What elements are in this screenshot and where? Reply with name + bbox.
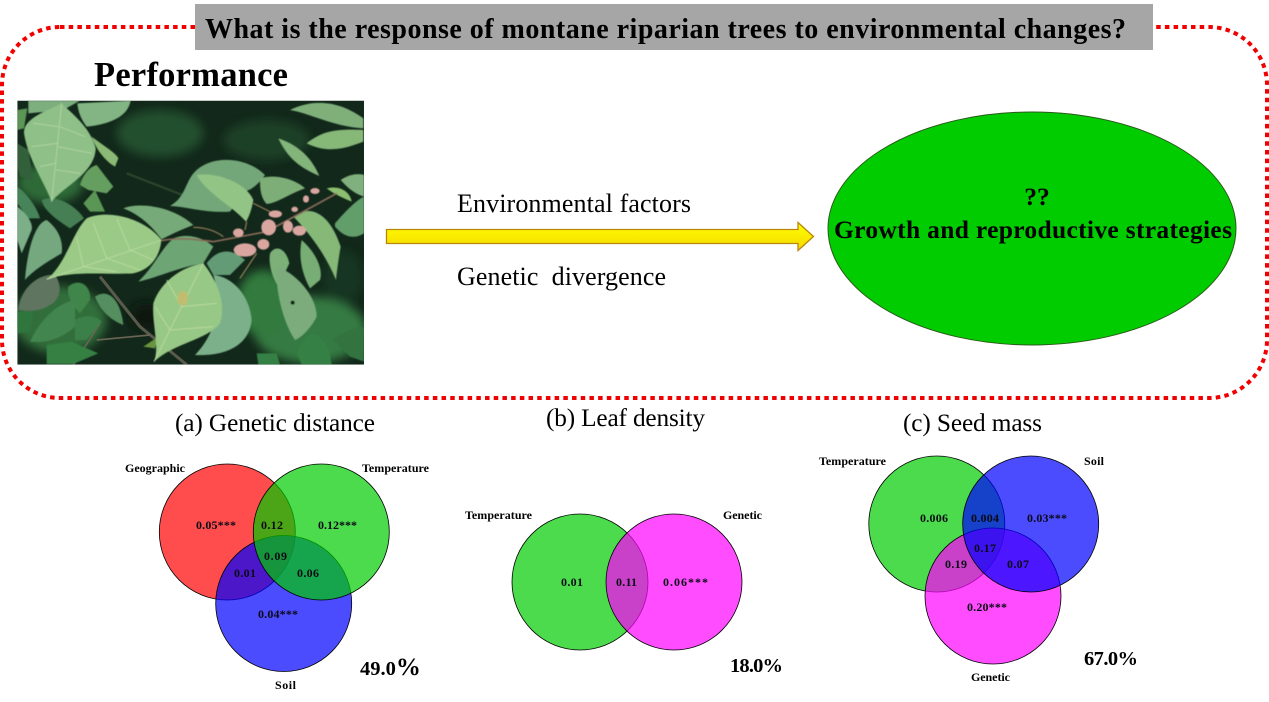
venn labels and values: 0.04*** — [258, 607, 298, 621]
venn labels and values: 0.01 — [561, 575, 583, 589]
ellipse: growth and reproductive strategies: ?? — [1024, 182, 1050, 211]
venn labels and values: 0.05*** — [196, 518, 236, 532]
heading: genetic distance: (a) Genetic distance — [175, 409, 375, 437]
venn labels and values: Genetic — [971, 670, 1011, 684]
heading: performance: Performance — [94, 56, 288, 94]
explained variance 49.0%: 49.0% — [360, 654, 421, 681]
explained variance 67.0%: 67.0% — [1084, 648, 1138, 670]
panel: genetic distance venn — [125, 409, 430, 692]
explained variance 18.0%: 18.0% — [730, 655, 783, 677]
dotted frame: performance panel — [2, 27, 1267, 398]
venn labels and values: 0.06*** — [663, 575, 708, 589]
venn labels and values: 0.07 — [1007, 557, 1029, 571]
venn labels and values: 0.11 — [616, 575, 637, 589]
venn labels and values: Temperature — [819, 454, 887, 468]
venn labels and values: 0.06 — [297, 566, 319, 580]
venn labels and values: 0.09 — [264, 549, 287, 563]
venn labels and values — [125, 461, 430, 692]
venn labels and values: Temperature — [465, 508, 533, 522]
label: genetic divergence: Genetic divergence — [457, 262, 666, 291]
ellipse: growth and reproductive strategies — [828, 112, 1236, 345]
venn labels and values: 0.19 — [945, 557, 967, 571]
venn labels and values: Genetic — [723, 508, 763, 522]
arrow: environmental factors to strategies — [386, 222, 814, 250]
photo: tree leaves — [13, 101, 367, 365]
venn labels and values: 0.03*** — [1027, 511, 1067, 525]
venn labels and values — [465, 508, 763, 589]
heading: seed mass: (c) Seed mass — [903, 409, 1042, 437]
venn labels and values: Soil — [1084, 454, 1105, 468]
label: environmental factors: Environmental factors — [457, 189, 691, 218]
venn labels and values: 0.12*** — [318, 518, 357, 532]
panel: seed mass venn — [819, 409, 1138, 684]
venn labels and values: 0.20*** — [967, 600, 1007, 614]
venn circles: geographic, soil, temperature — [159, 464, 389, 672]
heading: leaf density: (b) Leaf density — [546, 404, 705, 432]
title banner: What is the response of montane riparian trees to environmental changes? — [205, 14, 1126, 45]
venn labels and values: 0.17 — [974, 541, 996, 555]
venn labels and values: 0.01 — [234, 566, 256, 580]
venn circles: temperature, genetic, soil — [869, 456, 1099, 664]
venn labels and values: 0.004 — [971, 511, 999, 525]
ellipse: growth and reproductive strategies: Growth and reproductive strategies — [834, 215, 1232, 244]
venn labels and values — [819, 454, 1105, 684]
panel: leaf density venn — [465, 404, 783, 677]
venn labels and values: Geographic — [125, 461, 186, 475]
venn labels and values: Soil — [275, 678, 297, 692]
venn labels and values: 0.12 — [261, 518, 283, 532]
venn labels and values: Temperature — [362, 461, 430, 475]
venn circles: temperature, genetic — [512, 514, 742, 650]
venn labels and values: 0.006 — [920, 511, 948, 525]
title banner — [195, 4, 1153, 50]
